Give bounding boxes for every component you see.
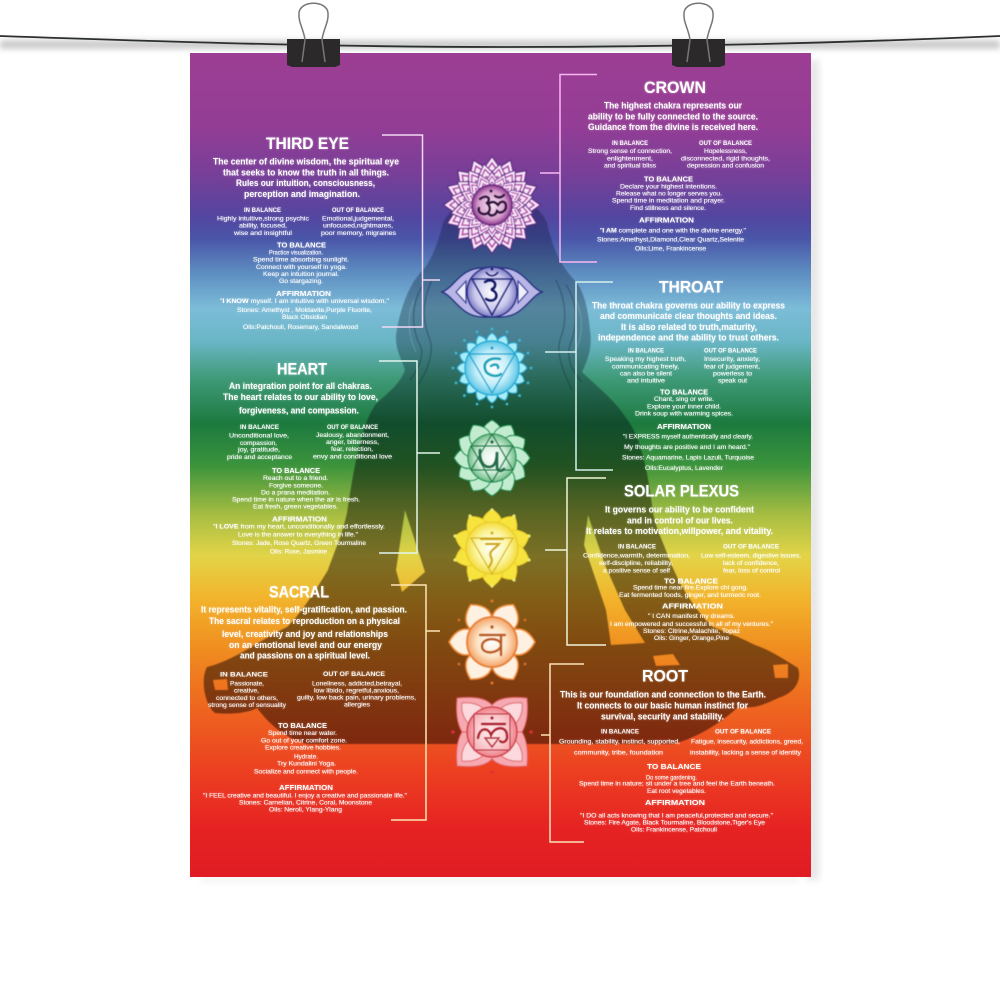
text block: sacral to balance: TO BALANCE [278, 723, 327, 730]
text block: throat in balance: can also be silent [620, 370, 672, 377]
text block: root to balance [579, 764, 775, 795]
text block: crown intro [588, 101, 758, 133]
text block: sacral to balance: Hydrate. [294, 754, 318, 761]
text block: crown out of balance [681, 140, 770, 170]
text block: sacral to balance: Spend time near water. [268, 730, 337, 737]
text block: sacral out of balance: guilty, low back pain, urinary problems, [297, 695, 416, 702]
icon: right binder clip [672, 3, 725, 67]
text block: solar plexus to balance [619, 578, 761, 599]
heading: solar plexus: SOLAR PLEXUS [624, 482, 739, 501]
text block: crown in balance: enlightenment, [607, 156, 653, 163]
text block: solar plexus affirmation: Oils: Ginger, Orange,Pine [654, 635, 729, 642]
text block: heart in balance: compassion, [240, 440, 277, 447]
text block: root out of balance: instability, lacking a sense of identity [690, 749, 802, 756]
text block: heart to balance: Forgive someone. [269, 482, 323, 489]
panel: throat [592, 278, 785, 472]
text block: solar plexus affirmation: I am empowered and successful in all of my ventures." [610, 621, 774, 628]
panel: heart [213, 359, 392, 555]
text block: third eye intro [213, 157, 399, 200]
text block: heart affirmation: "I LOVE from my heart, unconditionally and effortlessly. [213, 523, 385, 530]
text block: sacral in balance: strong sense of sensuality [208, 702, 287, 709]
text block: sacral in balance: connected to others, [216, 695, 278, 702]
text block: throat affirmation [622, 424, 754, 472]
text block: crown out of balance: depression and confusion [687, 163, 764, 170]
text block: solar plexus intro: and in control of our lives. [627, 515, 733, 526]
text block: heart to balance [232, 468, 360, 511]
text block: third eye out of balance [321, 207, 397, 237]
text block: crown in balance: IN BALANCE [612, 140, 649, 147]
heading: root: ROOT [642, 667, 689, 686]
text block: root out of balance: OUT OF BALANCE [715, 729, 772, 736]
text block: sacral in balance: Passionate, [230, 680, 264, 687]
text block: third eye intro: perception and imagination. [244, 189, 360, 200]
text block: sacral to balance [254, 723, 358, 775]
text block: third eye to balance: Keep an intuition journal. [263, 271, 339, 278]
text block: heart out of balance: OUT OF BALANCE [327, 424, 379, 431]
text block: throat out of balance: powerless to [713, 370, 752, 377]
text block: root in balance [559, 729, 680, 756]
text block: third eye to balance [253, 243, 349, 285]
text block: throat intro: independence and the ability to trust others. [598, 333, 779, 344]
text block: sacral affirmation [203, 785, 408, 814]
text block: heart out of balance: Jealousy, abandonment, [316, 432, 389, 439]
text block: solar plexus intro: It governs our ability to be confident [605, 504, 755, 515]
icon: heart chakra [454, 420, 530, 496]
text block: crown to balance: Find stillness and silence. [630, 205, 706, 212]
text block: heart affirmation: Love is the answer to everything in life." [238, 532, 359, 539]
text block: third eye out of balance: Emotional,judgemental, [322, 216, 394, 223]
text block: root to balance: Eat root vegetables. [647, 788, 706, 795]
text block: throat in balance [605, 348, 686, 385]
text block: solar plexus out of balance: lack of confidence, [723, 560, 779, 567]
text block: third eye to balance: Go stargazing. [279, 278, 323, 285]
heading: sacral: SACRAL [269, 583, 329, 602]
panel: crown [588, 78, 770, 252]
text block: solar plexus to balance: Spend time near fire.Explore chi gong. [633, 584, 748, 592]
text block: crown in balance [588, 140, 672, 170]
text block: throat to balance [635, 389, 733, 418]
text block: throat intro: It is also related to truth,maturity, [621, 322, 757, 333]
text block: sacral in balance [208, 672, 287, 709]
text block: throat in balance: and intuitive [627, 378, 665, 385]
text block: throat out of balance: fear of judgement, [704, 363, 760, 370]
text block: sacral affirmation: "I FEEL creative and beautiful. I enjoy a creative and passionate life." [203, 792, 408, 799]
text block: sacral intro: and passions on a spiritual level. [240, 651, 370, 662]
meditating silhouette [204, 195, 799, 744]
text block: sacral in balance: creative, [234, 688, 259, 695]
text block: root out of balance: Fatigue, insecurity, addictions, greed, [691, 739, 803, 746]
text block: solar plexus affirmation: Stones: Citrine,Malachite, Topaz [643, 628, 741, 635]
text block: sacral out of balance: Loneliness, addicted,betrayal, [312, 680, 402, 687]
text block: root out of balance [690, 729, 803, 756]
text block: third eye in balance [217, 207, 310, 237]
text block: crown to balance [612, 177, 725, 212]
text block: throat out of balance: speak out [718, 378, 747, 385]
text block: heart to balance: Eat fresh, green vegetables. [253, 504, 338, 511]
text block: crown affirmation: Oils:Lime, Frankincense [635, 245, 706, 252]
text block: solar plexus out of balance: fear, loss of control [723, 567, 781, 574]
text block: third eye to balance: Practice visualization. [269, 250, 323, 256]
panel: solar plexus [583, 482, 801, 642]
text block: crown in balance: and spiritual bliss [604, 163, 657, 170]
text block: solar plexus in balance: self-discipline, reliability, [599, 560, 673, 567]
text block: heart in balance: IN BALANCE [240, 424, 280, 431]
connector brackets [379, 74, 613, 842]
text block: solar plexus in balance: Confidence,warmth, determination, [583, 553, 690, 560]
text block: heart intro [223, 381, 378, 416]
text block: throat out of balance: Insecurity, anxiety, [704, 356, 760, 363]
text block: sacral out of balance: allergies [344, 702, 371, 709]
text block: sacral affirmation: Oils: Neroli, Ylang-Ylang [269, 807, 342, 814]
icon: throat chakra [435, 311, 549, 425]
text block: root intro: survival, security and stability. [601, 711, 724, 722]
text block: crown out of balance: OUT OF BALANCE [699, 140, 753, 147]
text block: solar plexus to balance: Eat fermented foods, ginger, and turmeric root. [619, 592, 761, 599]
text block: root affirmation [580, 800, 774, 833]
text block: third eye affirmation: Stones: Amethyst , Moldavite,Purple Fluorite, [237, 307, 372, 314]
text block: root to balance: Spend time in nature; sit under a tree and feel the Earth beneath. [579, 781, 775, 788]
text block: third eye in balance: IN BALANCE [244, 207, 282, 214]
text block: heart in balance: Unconditional love, [229, 433, 289, 440]
text block: crown intro: Guidance from the divine is received here. [588, 122, 758, 133]
text block: third eye in balance: ability, focused, [239, 223, 287, 230]
text block: sacral to balance: Explore creative hobbies. [265, 745, 341, 752]
panel: sacral [201, 583, 416, 814]
text block: root affirmation: AFFIRMATION [645, 800, 705, 807]
text block: heart out of balance: anger, bitterness, [326, 439, 379, 446]
text block: throat in balance: Speaking my highest truth, [605, 356, 686, 363]
text block: throat out of balance [704, 348, 760, 385]
text block: root intro: It connects to our basic human instinct for [577, 700, 748, 711]
hanging wire [0, 36, 1000, 47]
text block: heart out of balance: envy and conditional love [313, 453, 392, 460]
chakra icons column [423, 136, 561, 774]
text block: third eye to balance: TO BALANCE [277, 243, 326, 250]
text block: root intro: This is our foundation and connection to the Earth. [560, 689, 766, 700]
text block: crown to balance: Release what no longer serves you. [616, 191, 722, 198]
text block: solar plexus in balance: IN BALANCE [618, 544, 657, 551]
text block: solar plexus out of balance: OUT OF BALANCE [723, 544, 780, 551]
text block: root in balance: Grounding, stability, instinct, supported, [559, 739, 680, 746]
text block: third eye in balance: wise and insightful [233, 230, 293, 237]
heading: third eye: THIRD EYE [266, 134, 349, 153]
text block: crown out of balance: disconnected, rigid thoughts, [681, 156, 770, 163]
text block: sacral in balance: IN BALANCE [220, 672, 269, 679]
text block: throat affirmation: My thoughts are positive and I am heard." [624, 444, 751, 451]
text block: third eye in balance: Highly intuitive,strong psychic [217, 216, 310, 223]
text block: sacral intro: level, creativity and joy and relationships [222, 629, 388, 640]
text block: crown to balance: TO BALANCE [644, 177, 693, 184]
text block: heart affirmation: Stones: Jade, Rose Quartz, Green Tourmaline [232, 540, 366, 547]
text block: crown to balance: Spend time in meditation and prayer. [612, 198, 725, 205]
panel: third eye [213, 134, 399, 331]
text block: root in balance: IN BALANCE [601, 729, 640, 736]
text block: heart intro: forgiveness, and compassion. [239, 405, 359, 416]
text block: third eye intro: Rules our intuition, consciousness, [236, 178, 375, 189]
text block: solar plexus affirmation: AFFIRMATION [662, 603, 723, 610]
text block: solar plexus intro: It relates to motivation,willpower, and vitality. [586, 526, 773, 537]
text block: sacral out of balance [297, 671, 416, 709]
text block: third eye affirmation [220, 291, 390, 331]
text block: crown affirmation: "I AM complete and one with the divine energy." [600, 227, 747, 234]
text block: solar plexus in balance: a positive sense of self [603, 567, 670, 574]
text block: sacral out of balance: low libido, regretful,anxious, [314, 687, 399, 694]
text block: sacral intro: It represents vitality, self-gratification, and passion. [201, 605, 407, 616]
text block: sacral to balance: Go out of your comfort zone. [261, 737, 347, 744]
text block: third eye affirmation: "I KNOW myself. I am intuitive with universal wisdom." [220, 298, 390, 305]
text block: heart in balance [227, 424, 292, 461]
text block: crown affirmation [597, 218, 747, 252]
text block: sacral affirmation: Stones: Carnelian, Citrine, Coral, Moonstone [239, 799, 372, 806]
text block: sacral to balance: Try Kundalini Yoga. [277, 761, 336, 768]
text block: third eye out of balance: unfocused,nightmares, [323, 223, 393, 230]
text block: sacral affirmation: AFFIRMATION [279, 785, 333, 792]
text block: throat to balance: Explore your inner child. [647, 403, 721, 410]
icon: crown chakra [423, 136, 561, 274]
text block: crown intro: ability to be fully connected to the source. [588, 111, 758, 122]
text block: crown out of balance: Hopelessness, [704, 148, 747, 155]
text block: throat to balance: Chant, sing or write. [654, 396, 714, 403]
text block: root intro [560, 689, 766, 722]
text block: throat to balance: Drink soup with warming spices. [635, 411, 733, 418]
text block: root to balance: TO BALANCE [647, 764, 701, 771]
text block: solar plexus affirmation: " I CAN manifest my dreams. [648, 613, 735, 620]
text block: root in balance: community, tribe, foundation [574, 749, 663, 756]
text block: third eye intro: The center of divine wisdom, the spiritual eye [213, 157, 399, 168]
text block: throat out of balance: OUT OF BALANCE [704, 348, 758, 355]
text block: root affirmation: Oils: Frankincense, Patchouli [631, 826, 718, 833]
text block: crown affirmation: AFFIRMATION [639, 218, 694, 225]
text block: throat intro: The throat chakra governs our ability to express [592, 300, 785, 311]
text block: heart to balance: TO BALANCE [272, 468, 320, 475]
text block: heart in balance: pride and acceptance [227, 454, 292, 461]
text block: throat in balance: IN BALANCE [628, 348, 665, 355]
text block: sacral to balance: Socialize and connect with people. [254, 768, 358, 775]
heading: throat: THROAT [659, 278, 724, 297]
text block: third eye intro: that seeks to know the truth in all things. [223, 168, 389, 178]
text block: third eye affirmation: Oils:Patchouli, Rosemary, Sandalwood [243, 324, 358, 331]
text block: heart to balance: Do a prana meditation. [261, 489, 330, 496]
text block: throat in balance: communicating freely, [612, 363, 679, 370]
text block: heart intro: An integration point for all chakras. [229, 381, 372, 392]
text block: heart to balance: Reach out to a friend. [263, 475, 328, 482]
text block: third eye to balance: Connect with yourself in yoga. [256, 264, 347, 271]
text block: heart affirmation [213, 516, 385, 555]
text block: throat intro [592, 300, 785, 344]
text block: throat affirmation: Oils:Eucalyptus, Lavender [645, 465, 724, 472]
text block: sacral intro [201, 605, 407, 662]
text block: third eye out of balance: OUT OF BALANCE [332, 207, 385, 214]
text block: root to balance: Do some gardening. [646, 774, 697, 781]
text block: throat to balance: TO BALANCE [660, 389, 708, 396]
text block: heart in balance: joy, gratitude, [237, 447, 280, 454]
text block: heart to balance: Spend time in nature when the air is fresh. [232, 497, 360, 504]
text block: sacral intro: on an emotional level and our energy [229, 640, 383, 651]
text block: throat intro: and communicate clear thoughts and ideas. [600, 311, 777, 322]
text block: third eye to balance: Spend time absorbing sunlight. [253, 257, 349, 264]
text block: solar plexus affirmation [610, 603, 774, 642]
text block: throat affirmation: "I EXPRESS myself authentically and clearly. [623, 434, 753, 441]
text block: third eye affirmation: AFFIRMATION [276, 291, 331, 298]
icon: root chakra [451, 697, 533, 774]
text block: sacral intro: The sacral relates to reproduction on a physical [209, 616, 400, 627]
text block: solar plexus to balance: TO BALANCE [664, 578, 718, 585]
text block: root affirmation: Stones: Fire Agate, Black Tourmaline, Bloodstone,Tiger's Eye [584, 819, 765, 826]
text block: root affirmation: "I DO all acts knowing that I am peaceful,protected and secure." [580, 812, 774, 819]
text block: sacral out of balance: OUT OF BALANCE [323, 671, 386, 678]
text block: crown affirmation: Stones:Amethyst,Diamond,Clear Quartz,Selenite [597, 236, 744, 243]
heading: heart: HEART [277, 359, 328, 378]
text block: throat affirmation: Stones: Aquamarine, Lapis Lazuli, Turquoise [622, 454, 754, 461]
text block: crown intro: The highest chakra represents our [604, 101, 742, 112]
text block: solar plexus out of balance: Low self-esteem, digestive issues, [701, 553, 801, 560]
text block: third eye out of balance: poor memory, migraines [321, 230, 397, 237]
text block: heart affirmation: Oils: Rose, Jasmine [270, 548, 327, 555]
text block: solar plexus out of balance [701, 544, 801, 574]
icon: solar plexus chakra [452, 508, 532, 588]
text block: heart out of balance: fear, relection, [331, 446, 373, 453]
heading: crown: CROWN [644, 78, 706, 97]
text block: heart intro: The heart relates to our ability to love, [223, 392, 378, 403]
text block: third eye affirmation: Black Obsidian [282, 314, 327, 321]
text block: heart affirmation: AFFIRMATION [272, 516, 327, 523]
icon: left binder clip [287, 3, 340, 67]
text block: crown to balance: Declare your highest intentions. [620, 183, 717, 190]
poster gradient panel [190, 53, 811, 877]
icon: sacral chakra [449, 598, 535, 686]
text block: solar plexus intro [586, 504, 773, 537]
text block: throat affirmation: AFFIRMATION [657, 424, 711, 431]
text block: crown in balance: Strong sense of connection, [588, 148, 672, 155]
icon: third eye chakra [442, 267, 542, 317]
text block: heart out of balance [313, 424, 392, 460]
panel: root [559, 667, 803, 833]
text block: solar plexus in balance [583, 544, 690, 574]
